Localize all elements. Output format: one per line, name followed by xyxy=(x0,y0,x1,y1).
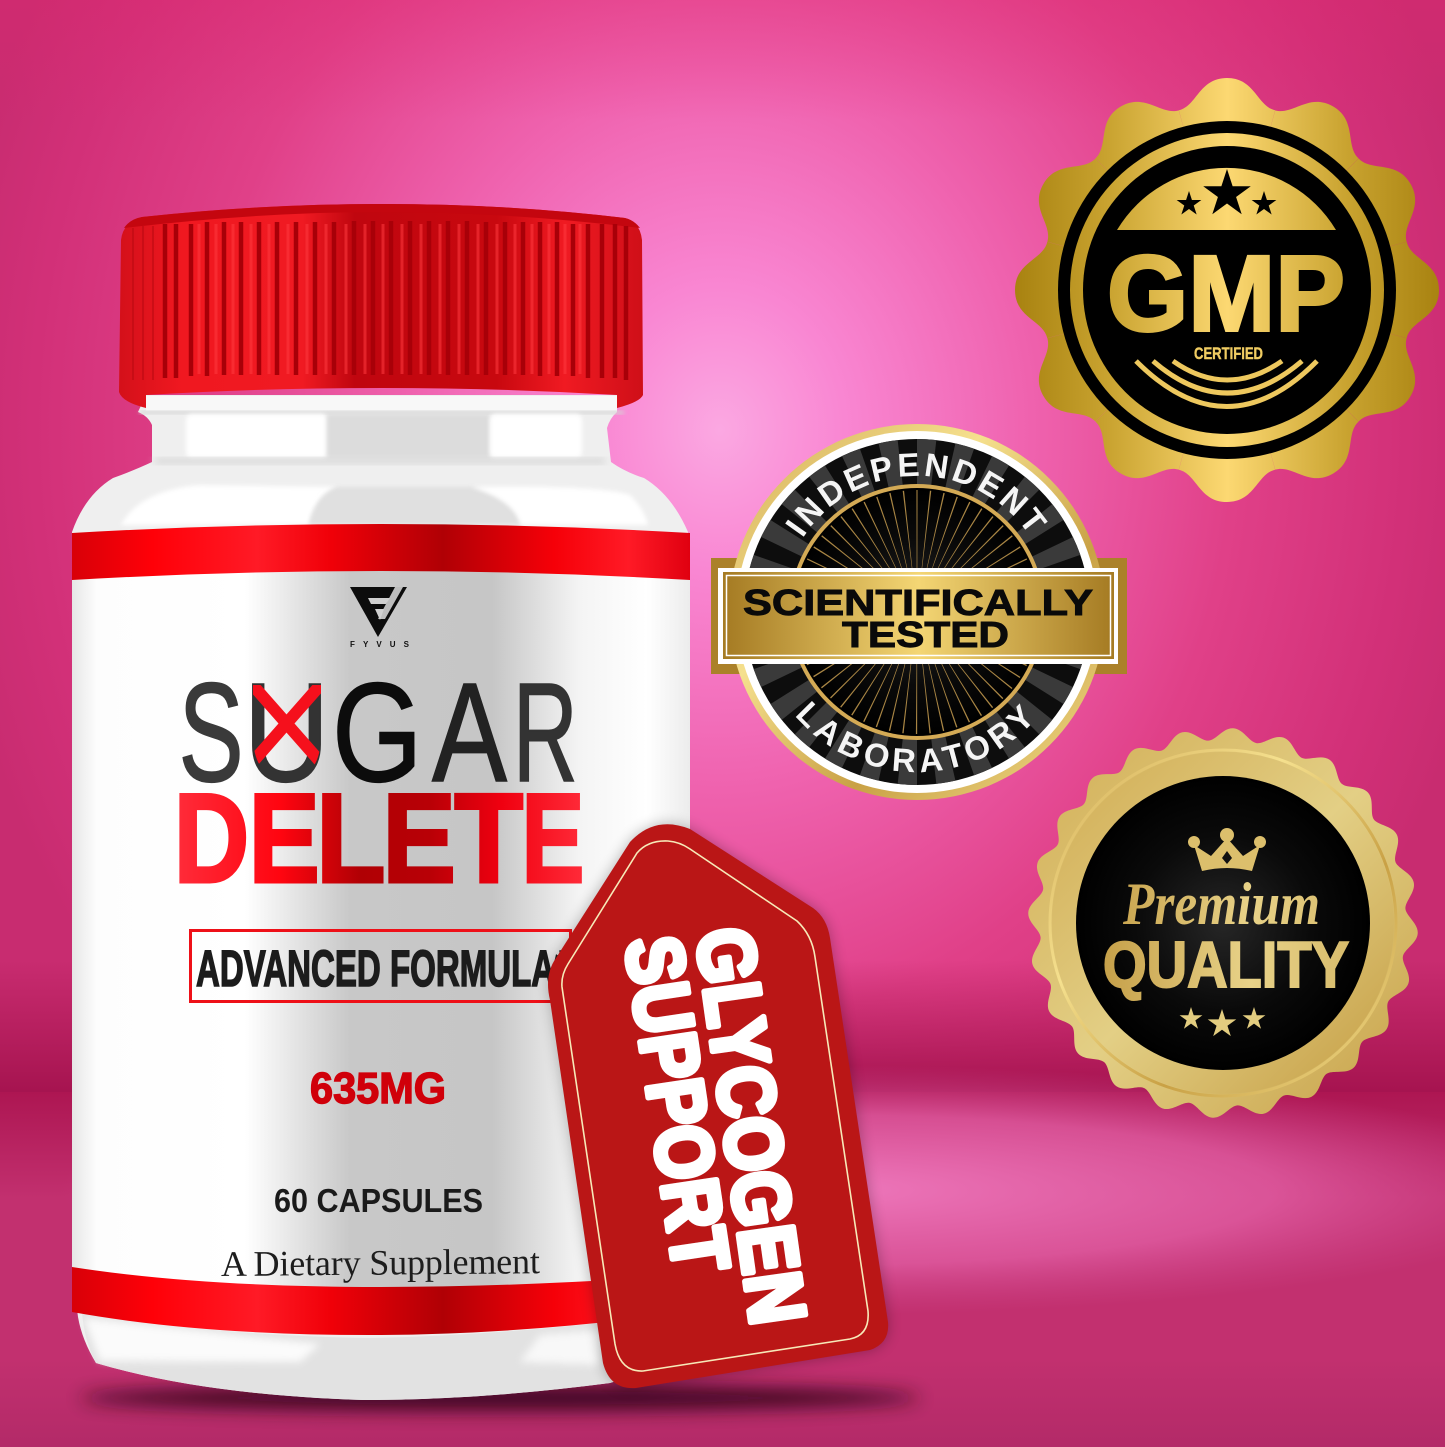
red ribbed cap xyxy=(119,204,643,408)
product name: SUGAR: G xyxy=(332,653,422,811)
dietary supplement line: A Dietary Supplement xyxy=(221,1241,540,1284)
product name: DELETE xyxy=(174,767,584,909)
product name: DELETE: E xyxy=(248,767,320,909)
product name: SUGAR: A xyxy=(432,653,507,811)
dosage: 635MG xyxy=(310,1064,446,1113)
ring text: laboratory: LABORATORY xyxy=(796,701,1030,772)
premium script: Premium xyxy=(1122,871,1320,937)
sunburst core xyxy=(789,484,1045,740)
gold ribbon xyxy=(718,568,1118,664)
stars xyxy=(1177,169,1276,215)
GMP lettering: GMP xyxy=(1107,232,1345,354)
quality lettering: QUALITY xyxy=(1103,928,1349,1001)
supplement bottle xyxy=(72,204,690,1400)
badge: GMP certified xyxy=(1010,70,1445,510)
ribbon text: tested: TESTED xyxy=(842,614,1009,655)
ring text: independent: INDEPENDENT xyxy=(785,453,1048,537)
brand logo: FYVUS: FYVUS xyxy=(350,640,410,649)
red price tag: glycogen support xyxy=(548,824,888,1388)
capsule count: 60 CAPSULES xyxy=(274,1182,483,1219)
label panel xyxy=(72,565,690,1290)
certified label: CERTIFIED xyxy=(1194,345,1263,363)
badge: scientifically tested xyxy=(711,424,1127,800)
bottom red band xyxy=(72,1267,690,1335)
product name: SUGAR xyxy=(179,653,578,811)
product name: DELETE: T xyxy=(454,767,523,909)
ribbon tails xyxy=(711,558,1127,674)
top red band xyxy=(72,524,690,580)
product name: DELETE: L xyxy=(316,767,386,909)
advanced formula box xyxy=(190,930,570,1002)
crown xyxy=(1188,828,1266,871)
tag text: support: SUPPORT xyxy=(608,930,746,1278)
badge: premium quality xyxy=(1020,720,1430,1125)
brand logo: FYVUS xyxy=(350,587,410,649)
stars xyxy=(1180,1007,1265,1036)
product name: DELETE: E xyxy=(382,767,456,909)
bottle body xyxy=(72,395,690,1400)
neck and shoulder highlights xyxy=(121,396,648,525)
advanced formula box: ADVANCED FORMULA* xyxy=(196,940,568,997)
product name: SUGAR: S xyxy=(179,653,244,811)
seal rings xyxy=(729,424,1105,800)
product name: DELETE: D xyxy=(174,767,249,909)
tag text: glycogen: GLYCOGEN xyxy=(679,922,823,1329)
product name: DELETE: E xyxy=(522,767,584,909)
product name: SUGAR: U xyxy=(244,653,330,811)
red X over the U xyxy=(253,685,321,764)
smile arcs xyxy=(1136,361,1317,406)
bottle ground shadow xyxy=(80,1385,920,1411)
ribbon text: scientifically: SCIENTIFICALLY xyxy=(743,582,1093,623)
base highlights xyxy=(82,1312,690,1400)
product name: SUGAR: R xyxy=(513,653,578,811)
